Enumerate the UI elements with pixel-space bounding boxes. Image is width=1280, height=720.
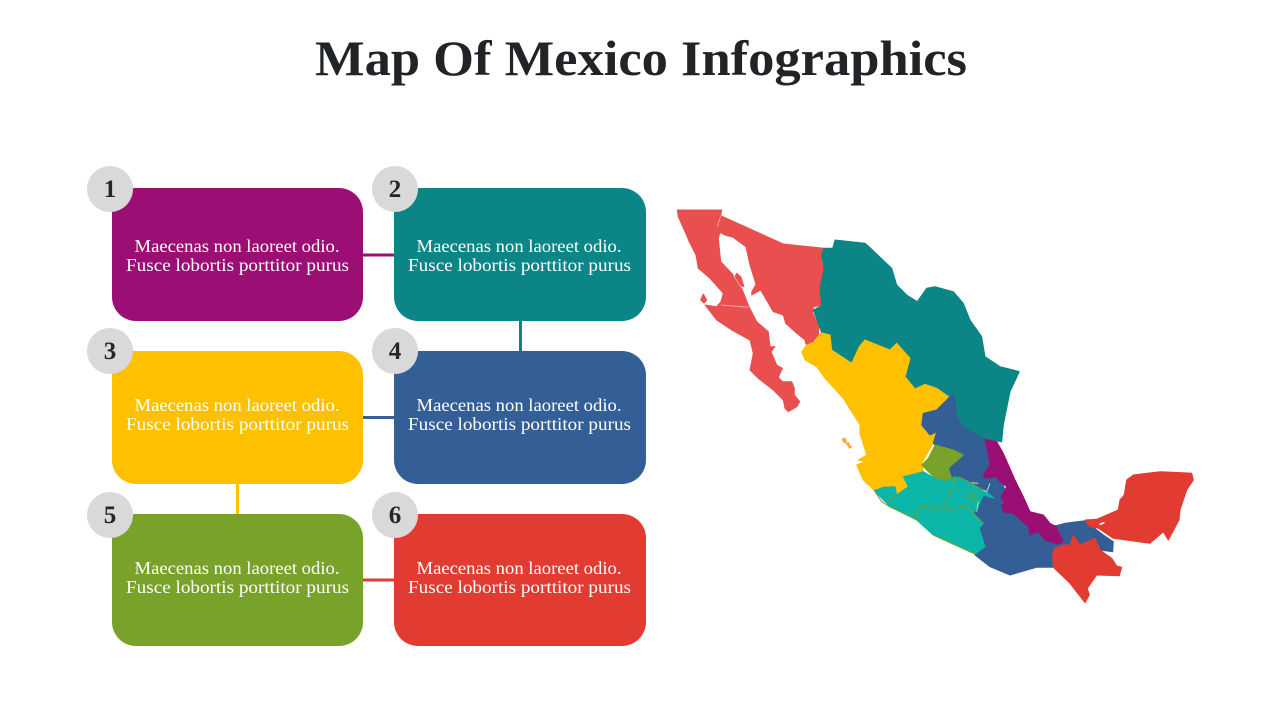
title: Map Of Mexico Infographics [315, 30, 967, 86]
card 2 [372, 166, 646, 321]
region: north [813, 240, 1019, 442]
card 3 [87, 328, 363, 484]
card 3: 3 [104, 338, 116, 365]
state borders [875, 477, 983, 554]
card 1: Fusce lobortis porttitor purus [126, 255, 349, 275]
card 5: Maecenas non laoreet odio. [134, 558, 340, 578]
card 2: Fusce lobortis porttitor purus [408, 255, 631, 275]
card 3: Fusce lobortis porttitor purus [126, 414, 349, 434]
card 3: Maecenas non laoreet odio. [134, 395, 340, 415]
region: chiapas [1053, 535, 1122, 603]
card 1: Maecenas non laoreet odio. [134, 236, 340, 256]
card 6 [372, 492, 646, 646]
region: pacific turquoise [874, 472, 994, 554]
region: gulf magenta [983, 439, 1063, 544]
region: central and south blue [922, 395, 1113, 575]
card 5: 5 [104, 502, 116, 529]
card 6: Maecenas non laoreet odio. [416, 558, 622, 578]
card 4: Fusce lobortis porttitor purus [408, 414, 631, 434]
card 4 [372, 328, 646, 484]
card 6: Fusce lobortis porttitor purus [408, 577, 631, 597]
card 2: 2 [389, 176, 401, 203]
card 4: 4 [389, 338, 402, 365]
region: west [802, 333, 949, 495]
region: bajio green [922, 445, 963, 482]
card 5: Fusce lobortis porttitor purus [126, 577, 349, 597]
card 4: Maecenas non laoreet odio. [416, 395, 622, 415]
region: northwest [677, 210, 825, 412]
card 1: 1 [104, 176, 116, 203]
islets [841, 437, 852, 449]
map of Mexico [677, 210, 1193, 603]
card 6: 6 [389, 502, 401, 529]
card 1 [87, 166, 363, 321]
card 5 [87, 492, 363, 646]
region: yucatan [1085, 472, 1193, 543]
connectors between cards [236, 254, 522, 582]
card 2: Maecenas non laoreet odio. [416, 236, 622, 256]
islands [701, 294, 707, 303]
